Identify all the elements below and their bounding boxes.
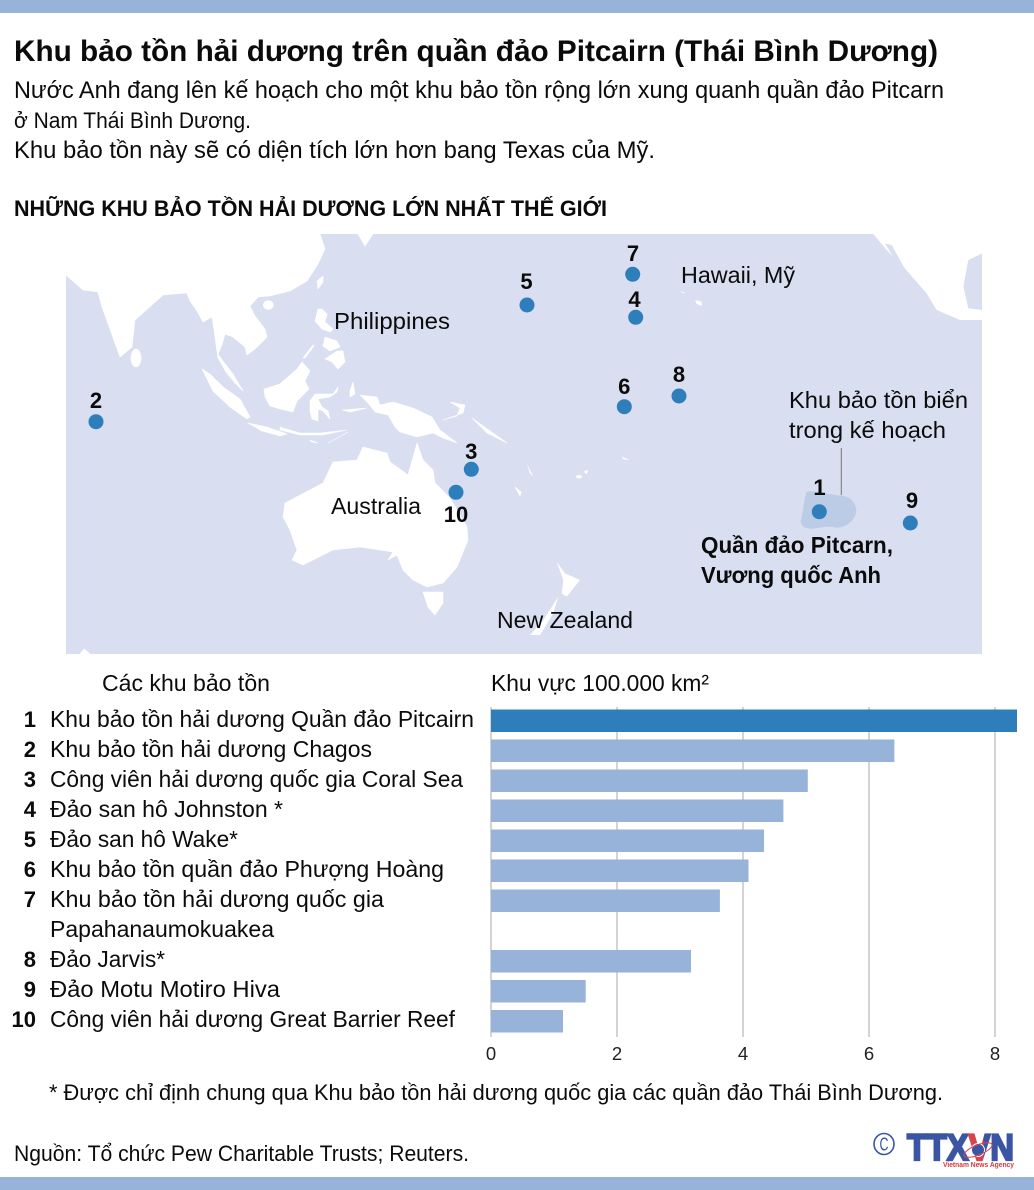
- label: planned reserve: trong kế hoạch: [789, 417, 946, 443]
- row 6 label: 6: [24, 857, 36, 882]
- row 4 label: Đảo san hô Johnston *: [50, 796, 283, 822]
- icon: copyright: C: [880, 1134, 888, 1154]
- marker 9: [903, 488, 918, 530]
- marker 7: [625, 241, 640, 282]
- planned reserve zone: [801, 491, 856, 529]
- marker 5: 5: [520, 269, 533, 294]
- logo: TTXVN: [874, 1127, 1015, 1169]
- row 6 label: Khu bảo tồn quần đảo Phượng Hoàng: [50, 856, 444, 882]
- bar 10: [491, 1010, 563, 1032]
- map heading: NHỮNG KHU BẢO TỒN HẢI DƯƠNG LỚN NHẤT THẾ GIỚI: [14, 196, 607, 221]
- row 2 label: 2: [24, 737, 36, 762]
- axis tick labels: [486, 1043, 1000, 1064]
- land masses west: [66, 234, 521, 654]
- row 5 label: 5: [24, 827, 36, 852]
- marker 9: 9: [906, 488, 918, 513]
- label: planned reserve: Khu bảo tồn biển: [789, 387, 968, 413]
- row 7 label: [24, 886, 384, 942]
- label: Pitcairn islands: [701, 532, 893, 588]
- row 7 label: Papahanaumokuakea: [50, 916, 274, 942]
- logo wordmark: TTXVN: [907, 1127, 1014, 1168]
- bar 8: [491, 950, 691, 972]
- axis tick labels: 2: [612, 1043, 622, 1064]
- label: Australia: Australia: [331, 493, 421, 519]
- bar 5: [491, 830, 764, 852]
- axis tick labels: 0: [486, 1043, 496, 1064]
- row 9 label: 9: [24, 977, 36, 1002]
- label: Pitcairn islands: Vương quốc Anh: [701, 562, 881, 588]
- footnote: * Được chỉ định chung qua Khu bảo tồn hải dương quốc gia các quần đảo Thái Bình Dương.: [49, 1080, 943, 1105]
- row 2 label: Khu bảo tồn hải dương Chagos: [50, 736, 372, 762]
- map ocean background: [66, 234, 982, 654]
- marker 4: [628, 287, 643, 325]
- bar 6: [491, 860, 748, 882]
- icon: copyright: [874, 1134, 894, 1154]
- bar 2: [491, 740, 894, 762]
- intro text: [14, 77, 944, 164]
- marker 2: 2: [90, 388, 102, 413]
- row 8 label: Đảo Jarvis*: [50, 946, 165, 972]
- row 10 label: 10: [12, 1007, 36, 1032]
- bar 1: [491, 710, 1017, 732]
- row 7 label: Khu bảo tồn hải dương quốc gia: [50, 886, 384, 912]
- marker 2: [88, 388, 104, 429]
- row 3 label: Công viên hải dương quốc gia Coral Sea: [50, 766, 463, 792]
- row 3 label: 3: [24, 767, 36, 792]
- leader line: [840, 448, 842, 495]
- map panel: [66, 234, 982, 654]
- logo globe: [962, 1140, 994, 1160]
- list of reserves: [12, 706, 474, 1032]
- label: planned reserve: [789, 387, 968, 443]
- label: New Zealand: New Zealand: [497, 607, 633, 633]
- row 1 label: 1: [24, 707, 36, 732]
- bar 3: [491, 770, 808, 792]
- intro text: Nước Anh đang lên kế hoạch cho một khu bảo tồn rộng lớn xung quanh quần đảo Pitcarn: [14, 77, 944, 104]
- bar chart: [486, 707, 1017, 1064]
- marker 1: [812, 475, 827, 519]
- intro text: Khu bảo tồn này sẽ có diện tích lớn hơn bang Texas của Mỹ.: [14, 137, 655, 164]
- marker 7: 7: [627, 241, 639, 266]
- bar 9: [491, 980, 586, 1002]
- top band: [0, 0, 1034, 13]
- row 5 label: Đảo san hô Wake*: [50, 826, 238, 852]
- bar 4: [491, 800, 783, 822]
- title: Khu bảo tồn hải dương trên quần đảo Pitcairn (Thái Bình Dương): [14, 35, 938, 68]
- row 4 label: 4: [24, 797, 37, 822]
- label: Pitcairn islands: Quần đảo Pitcarn,: [701, 532, 893, 558]
- label: Hawaii: Hawaii, Mỹ: [681, 262, 795, 288]
- row 8 label: 8: [24, 947, 36, 972]
- marker 5: [520, 269, 534, 312]
- marker 10: 10: [444, 502, 468, 527]
- axis tick labels: 4: [738, 1043, 748, 1064]
- list heading: Các khu bảo tồn: [102, 670, 270, 696]
- bottom band: [0, 1177, 1034, 1190]
- marker 3: 3: [465, 439, 477, 464]
- marker 8: [672, 362, 686, 404]
- marker 10: [444, 485, 468, 527]
- axis tick labels: 6: [864, 1043, 874, 1064]
- source: Nguồn: Tổ chức Pew Charitable Trusts; Reuters.: [14, 1141, 469, 1166]
- marker 8: 8: [673, 362, 685, 387]
- marker 4: 4: [628, 287, 641, 312]
- axis tick labels: 8: [990, 1043, 1000, 1064]
- intro text: ở Nam Thái Bình Dương.: [14, 108, 251, 133]
- logo tagline: Vietnam News Agency: [943, 1160, 1015, 1169]
- marker 1: 1: [813, 475, 826, 500]
- marker 6: 6: [618, 374, 630, 399]
- row 7 label: 7: [24, 887, 36, 912]
- row 10 label: Công viên hải dương Great Barrier Reef: [50, 1006, 456, 1032]
- chart heading: Khu vực 100.000 km²: [491, 670, 709, 696]
- row 9 label: Đảo Motu Motiro Hiva: [50, 976, 280, 1002]
- land masses east: [527, 234, 982, 635]
- marker 3: [464, 439, 479, 477]
- marker 6: [617, 374, 632, 414]
- row 1 label: Khu bảo tồn hải dương Quần đảo Pitcairn: [50, 706, 474, 732]
- bar 7: [491, 890, 720, 912]
- label: Philippines: Philippines: [334, 308, 450, 334]
